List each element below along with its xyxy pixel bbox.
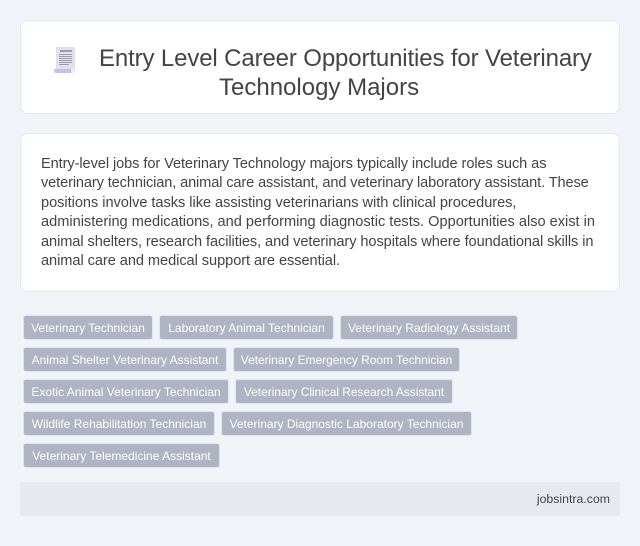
tag xyxy=(235,379,453,404)
tag: Laboratory Animal Technician xyxy=(168,321,325,335)
footer bar xyxy=(20,482,620,516)
tag xyxy=(340,315,518,340)
tag xyxy=(233,347,460,372)
footer source text: jobsintra.com xyxy=(537,492,610,506)
description text: positions involve tasks like assisting veterinarians with clinical procedures, xyxy=(41,195,516,211)
title: Technology Majors xyxy=(219,74,419,101)
tag xyxy=(23,379,229,404)
panel: description card xyxy=(20,133,620,292)
description text: animal shelters, research facilities, and veterinary hospitals where foundational skills in xyxy=(41,234,593,250)
tag xyxy=(159,315,334,340)
title xyxy=(99,45,592,101)
tag: Exotic Animal Veterinary Technician xyxy=(31,385,221,399)
tag xyxy=(23,443,220,468)
description text: veterinary technician, animal care assistant, and veterinary laboratory assistant. These xyxy=(41,175,589,191)
title: Entry Level Career Opportunities for Veterinary xyxy=(99,45,592,72)
tag: Veterinary Technician xyxy=(31,321,145,335)
panel: title card xyxy=(20,20,620,114)
description text xyxy=(41,156,595,269)
description text: Entry-level jobs for Veterinary Technology majors typically include roles such as xyxy=(41,156,546,172)
tag xyxy=(221,411,472,436)
tag: Veterinary Radiology Assistant xyxy=(348,321,510,335)
description text: administering medications, and performing diagnostic tests. Opportunities also exist in xyxy=(41,214,595,230)
tag: Animal Shelter Veterinary Assistant xyxy=(32,353,218,367)
tag: Veterinary Emergency Room Technician xyxy=(241,353,452,367)
tag xyxy=(23,315,153,340)
icon: document scroll xyxy=(54,47,75,74)
tag xyxy=(23,411,215,436)
tag: Veterinary Clinical Research Assistant xyxy=(244,385,444,399)
tag list xyxy=(23,315,518,468)
tag: Wildlife Rehabilitation Technician xyxy=(32,417,206,431)
tag: Veterinary Diagnostic Laboratory Technician xyxy=(230,417,463,431)
description text: animal care and medical support are essential. xyxy=(41,253,340,269)
tag: Veterinary Telemedicine Assistant xyxy=(32,449,211,463)
tag xyxy=(23,347,227,372)
